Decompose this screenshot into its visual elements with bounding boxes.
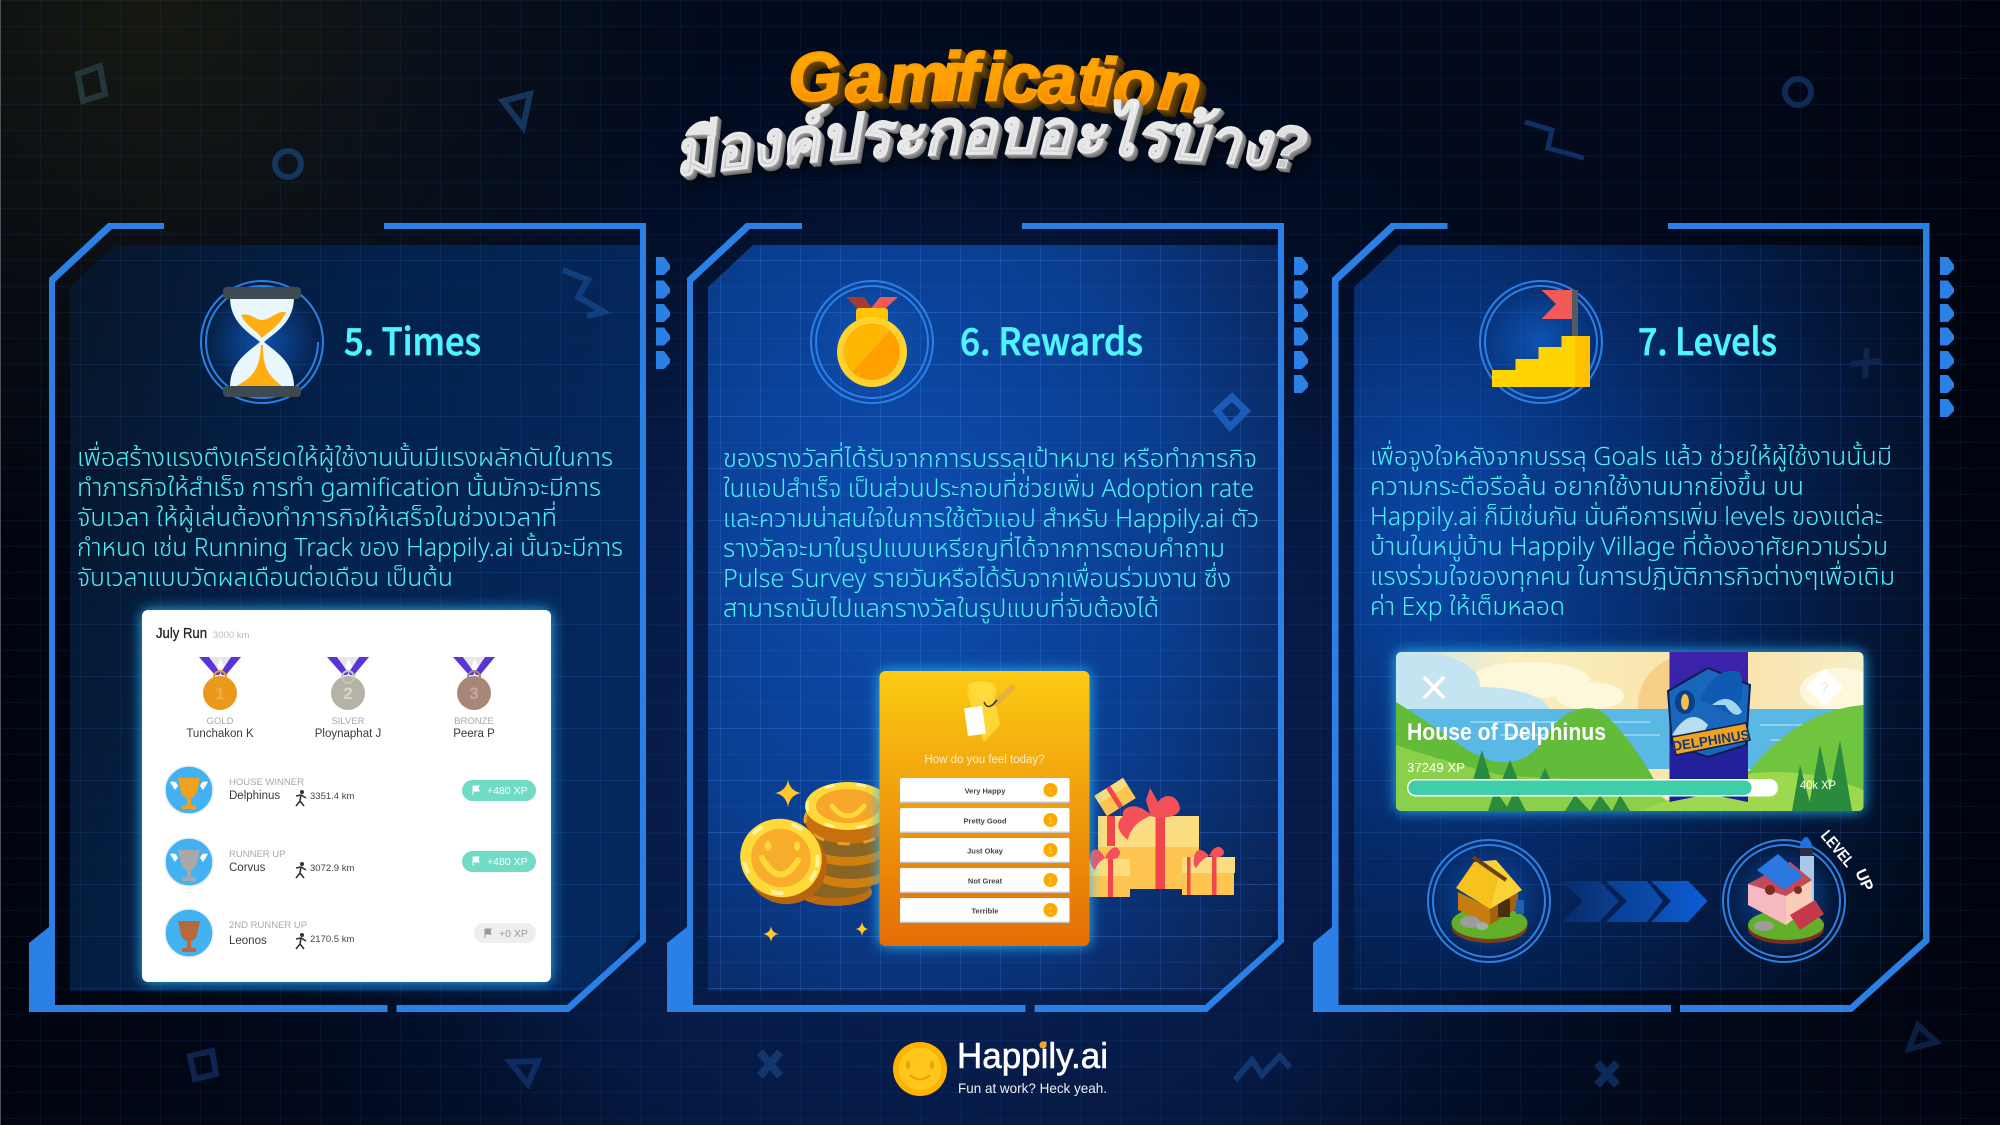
icon: medal [811,281,933,403]
close icon [1424,677,1444,698]
body text: และความน่าสนใจในการใช้ตัวแอป สำหรับ Happily.ai ตัว [723,501,1259,539]
icon: stairs with flag [1480,281,1602,403]
panel frame [1313,223,1930,1012]
leaderboard card: 3000 km [213,630,250,641]
survey option: Just Okay: 1 [1048,846,1053,856]
body text: Pulse Survey รายวันหรือได้รับจากเพื่อนร่วมงาน ซึ่ง [723,561,1231,599]
row: runner up: +480 XP [487,856,528,868]
row: runner up: 3072.9 km [310,863,354,874]
level arrows [1562,881,1708,922]
row: house winner [165,766,536,814]
body text: เพื่อจูงใจหลังจากบรรลุ Goals แล้ว ช่วยให้ผู้ใช้งานนั้นมี [1370,439,1892,477]
heading: 5. Times: 5. Times [344,312,481,366]
row: runner up: RUNNER UP [229,849,285,860]
row: 2nd runner up [165,909,536,957]
mascot character [964,681,1012,742]
survey card [880,671,1090,946]
body text: ความกระตือรือล้น อยากใช้งานมากยิ่งขึ้น บน [1370,469,1804,507]
logo: Happily.ai [893,1035,1108,1096]
panel: 7. Levels [1313,223,1954,1012]
silver medal: 2 [343,684,353,703]
logo wordmark: Happily.ai [957,1035,1108,1076]
side tabs [1294,257,1308,393]
house crest [1668,668,1751,757]
decorative plus [1851,348,1882,378]
bronze medal [453,657,495,740]
survey option: Not Great [900,868,1070,893]
panel frame [667,223,1284,1012]
house crest: DELPHINUS [1671,727,1751,754]
panel: 5. Times [29,223,670,1012]
survey option: Just Okay: Just Okay [967,846,1004,856]
decorative zigzag [563,270,604,316]
panel fill [708,245,1278,991]
body text: จับเวลาแบบวัดผลเดือนต่อเดือน เป็นต้น [77,560,453,598]
gold medal: GOLD [207,716,234,727]
panel: 6. Rewards [667,223,1308,1012]
silver medal: Ploynaphat J [315,728,381,740]
row: house winner: +480 XP [487,785,528,797]
card header: July Run [156,626,207,642]
body text: Happily.ai ก็มีเช่นกัน นั่นคือการเพิ่ม levels ของแต่ละ [1370,499,1883,537]
survey option: Not Great: 1 [1048,876,1053,886]
panel frame [29,223,646,1012]
row: 2nd runner up: 2ND RUNNER UP [229,920,307,931]
title: Thai subtitle: มีองค์ประกอบอะไรบ้าง? [680,98,1312,186]
heading: 7. Levels: 7. Levels [1638,312,1777,366]
survey option: Very Happy: 1 [1048,786,1053,796]
row: 2nd runner up: 2170.5 km [310,934,354,945]
row: 2nd runner up: +0 XP [499,928,528,940]
bronze medal: BRONZE [454,716,494,727]
body text: ในแอปสำเร็จ เป็นส่วนประกอบที่ช่วยเพิ่ม Adoption rate [723,471,1254,509]
body text: ค่า Exp ให้เต็มหลอด [1370,589,1565,627]
silver medal: SILVER [331,716,365,727]
survey option: Just Okay [900,838,1070,863]
bronze medal: 3 [469,684,479,703]
sparkles [763,780,868,942]
house name: House of Delphinus [1407,719,1606,746]
level up label [1817,828,1876,894]
body text: รางวัลจะมาในรูปแบบเหรียญที่ได้จากการตอบคำถาม [723,531,1225,569]
level up label: UP [1851,867,1876,894]
side tabs [656,257,670,369]
icon: hourglass [201,281,323,403]
help icon: ? [1820,680,1829,697]
body text [723,441,1259,629]
survey option: Pretty Good: Pretty Good [964,816,1007,826]
row: house winner: Delphinus [229,790,280,802]
leaderboard card [142,610,551,982]
body text: ของรางวัลที่ได้รับจากการบรรลุเป้าหมาย หรือทำภารกิจ [723,441,1257,479]
side tabs [1940,257,1954,417]
body text: สามารถนับไปแลกรางวัลในรูปแบบที่จับต้องได้ [723,591,1159,629]
banner scenery [1396,652,1864,811]
banner flag [1670,652,1748,802]
body text: จับเวลา ให้ผู้เล่นต้องทำภารกิจให้เสร็จในช่วงเวลาที่ [77,500,557,538]
title [680,37,1312,186]
survey option: Terrible: Terrible [972,906,998,916]
survey option: Pretty Good: 1 [1048,816,1053,826]
row: runner up [165,838,536,886]
title: Gamification: Gamification [786,37,1205,127]
heading: 6. Rewards: 6. Rewards [960,312,1143,366]
gold medal [186,657,254,740]
decorative diamond [1217,397,1246,427]
village house level 1 [1428,840,1550,962]
xp progress bar [1407,779,1778,796]
silver medal [315,657,381,740]
max xp: 40k XP [1800,778,1836,792]
house banner [1360,652,1880,811]
survey option: Very Happy: Very Happy [965,786,1006,796]
survey option: Terrible: 1 [1048,906,1053,916]
gold medal: Tunchakon K [186,728,254,740]
village house level 2 [1723,837,1845,962]
help icon [1808,671,1841,703]
body text [77,440,623,598]
logo tagline: Fun at work? Heck yeah. [958,1080,1107,1096]
body text: แรงร่วมใจของทุกคน ในการปฏิบัติภารกิจต่างๆเพื่อเติม [1370,559,1895,597]
illustration: gold coins [729,780,891,942]
survey option: Very Happy [900,778,1070,803]
survey question: How do you feel today? [924,754,1045,766]
logo dot [1039,1041,1047,1049]
gold medal: 1 [215,684,225,703]
body text: กำหนด เช่น Running Track ของ Happily.ai นั้นจะมีการ [77,530,623,568]
row: 2nd runner up: Leonos [229,935,267,947]
body text: เพื่อสร้างแรงตึงเครียดให้ผู้ใช้งานนั้นมีแรงผลักดันในการ [77,440,613,478]
current xp: 37249 XP [1407,760,1465,775]
panel fill [70,245,640,991]
panel fill [1354,245,1923,991]
illustration: gift boxes [1089,778,1235,897]
body text: บ้านในหมู่บ้าน Happily Village ที่ต้องอาศัยความร่วม [1370,529,1888,567]
survey option: Not Great: Not Great [968,876,1003,886]
survey option: Pretty Good [900,808,1070,833]
level up label: LEVEL [1817,828,1857,871]
logo coin [893,1042,947,1096]
survey option: Terrible [900,898,1070,923]
body text [1370,439,1895,627]
row: house winner: 3351.4 km [310,791,354,802]
body text: ทำภารกิจให้สำเร็จ การทำ gamification นั้นมักจะมีการ [77,470,601,508]
row: house winner: HOUSE WINNER [229,777,304,788]
row: runner up: Corvus [229,862,266,874]
bronze medal: Peera P [453,728,495,740]
